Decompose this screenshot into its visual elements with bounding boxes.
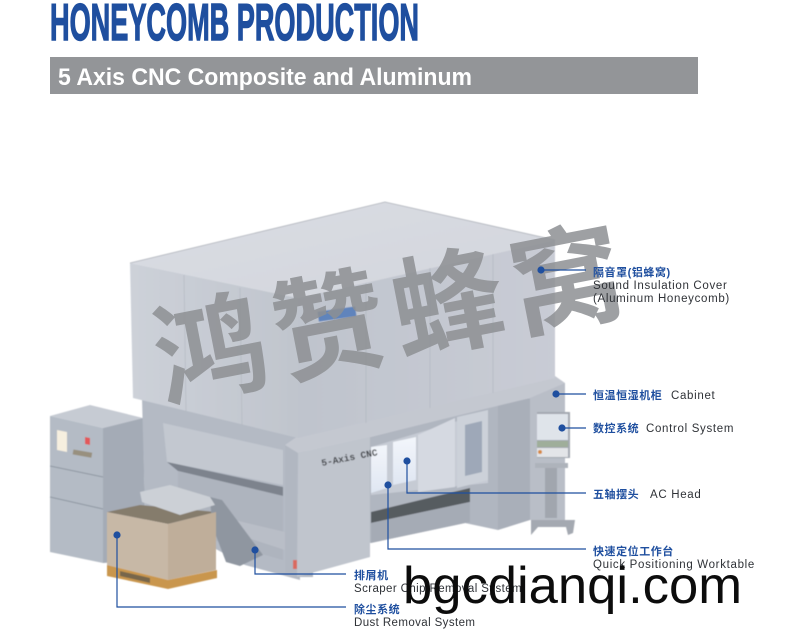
callout: scraper chip removal system: 排屑机	[354, 568, 389, 582]
callout: dust removal system: 除尘系统	[354, 602, 400, 616]
callout: AC head: 五轴摆头	[593, 487, 639, 501]
callout: quick positioning worktable	[384, 481, 755, 571]
cardboard box and conveyor	[107, 485, 263, 589]
callout: cabinet: 恒温恒湿机柜	[593, 388, 662, 402]
control panel	[531, 412, 575, 535]
callout: sound insulation cover: Sound Insulation Cover	[593, 280, 728, 292]
callout: control system	[558, 421, 734, 435]
watermark: company name: 鸿赞蜂窝	[144, 208, 643, 423]
callout: scraper chip removal system: Scraper Chip Removal System	[354, 583, 522, 595]
callout: quick positioning worktable: 快速定位工作台	[593, 544, 674, 558]
callout: quick positioning worktable: Quick Positioning Worktable	[593, 559, 755, 571]
callout: control system: 数控系统	[593, 421, 639, 435]
dust removal cabinet	[50, 405, 146, 563]
insulation hood	[130, 202, 555, 438]
callout: sound insulation cover	[537, 265, 730, 305]
hood logo	[317, 306, 357, 322]
callout: sound insulation cover: 隔音罩(铝蜂窝)	[593, 265, 671, 279]
machine front with doors	[370, 405, 498, 543]
machine illustration	[50, 202, 575, 589]
watermark: website: bgcdianqi.com	[403, 557, 742, 615]
callout: AC head	[403, 457, 701, 501]
machine ledge under hood	[285, 376, 565, 453]
callout: dust removal system: Dust Removal System	[354, 617, 475, 629]
machine lower body	[142, 398, 370, 580]
subtitle text: 5 Axis CNC Composite and Aluminum	[58, 64, 472, 91]
callout: control system: Control System	[646, 423, 734, 435]
callout: cabinet	[552, 388, 716, 402]
callout: cabinet: Cabinet	[671, 390, 716, 402]
callout: AC head: AC Head	[650, 489, 701, 501]
callout: scraper chip removal system	[251, 546, 522, 595]
5-Axis CNC plate text: 5-Axis CNC	[320, 447, 379, 469]
callout: dust removal system	[113, 531, 475, 629]
machine right cabinet	[498, 383, 565, 530]
callout: sound insulation cover: (Aluminum Honeycomb)	[593, 293, 730, 305]
subtitle bar	[50, 57, 698, 94]
